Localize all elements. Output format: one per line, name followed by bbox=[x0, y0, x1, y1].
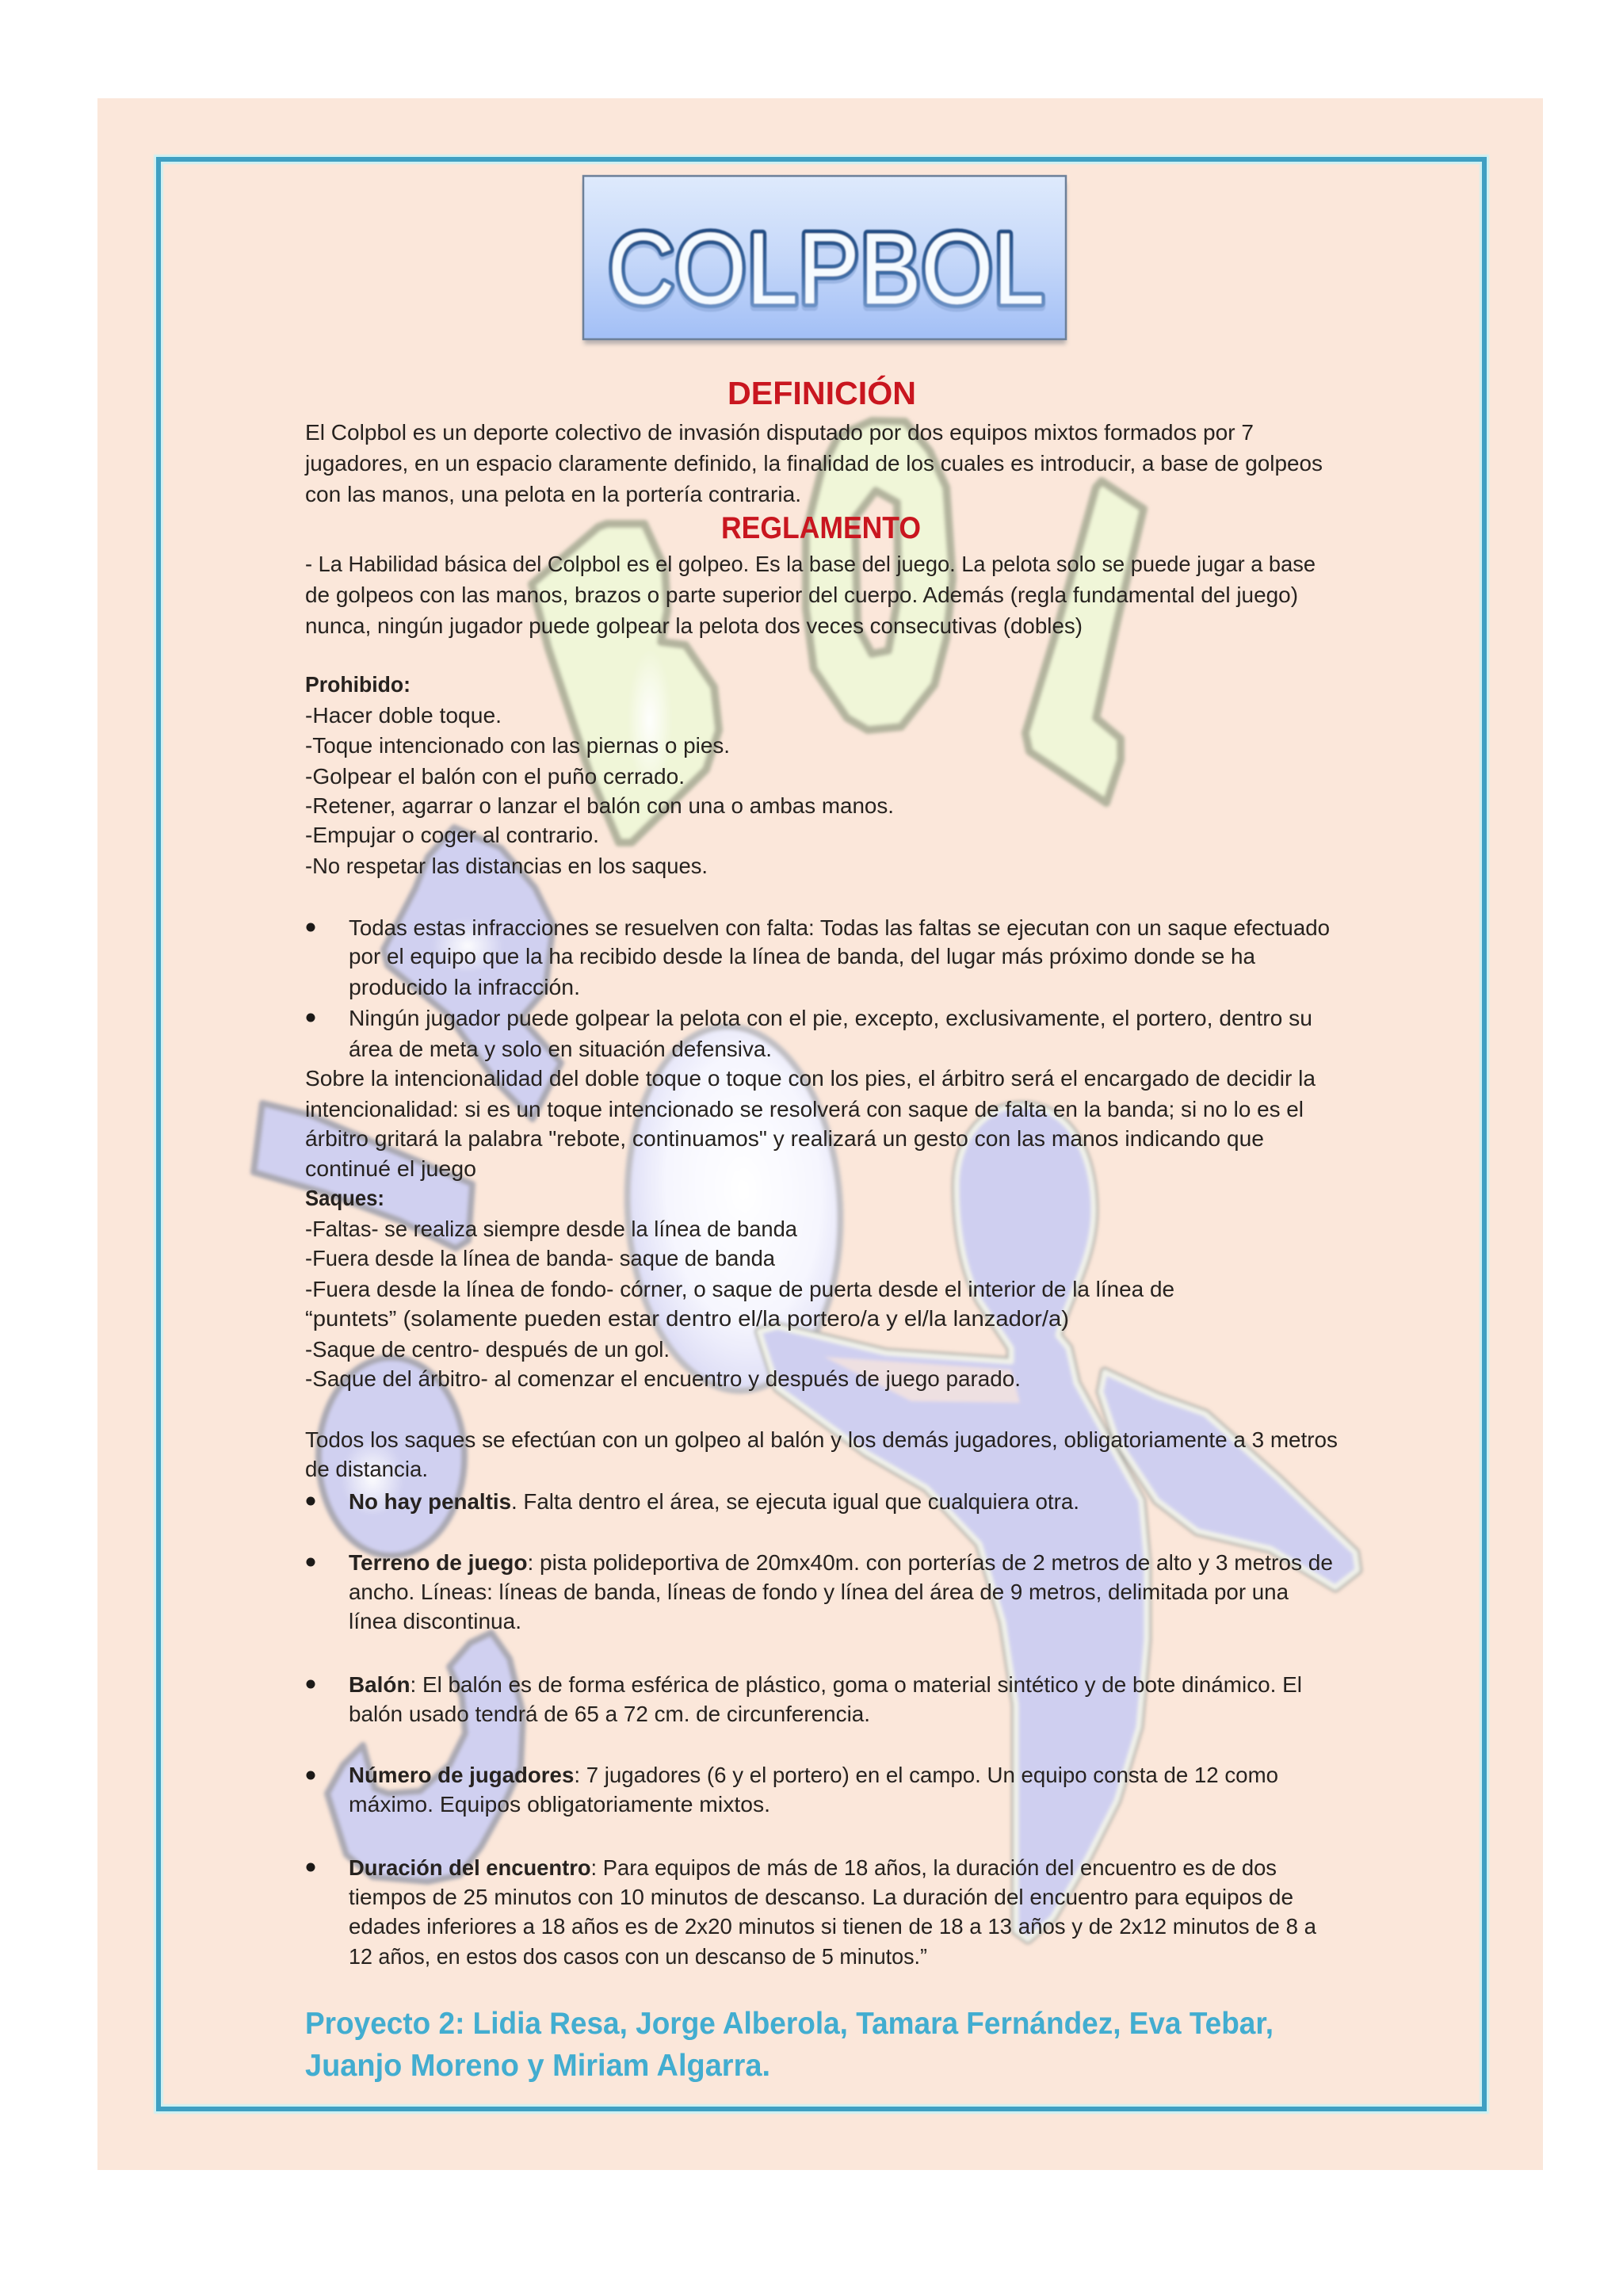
bulleted text: infracciones: Ningún jugador puede golpear la pelota con el pie, excepto, exclusivamente, el portero, dentro su bbox=[349, 1006, 1312, 1030]
frame: blue border bbox=[158, 159, 1484, 2109]
text block: definición: jugadores, en un espacio claramente definido, la finalidad de los cuales es introducir, a base de golpeos bbox=[304, 451, 1323, 476]
bulleted text: número de jugadores: máximo. Equipos obligatoriamente mixtos. bbox=[349, 1792, 770, 1817]
title banner: COLPBOL: COLPBOL bbox=[608, 212, 1044, 326]
text block: saques list bbox=[305, 1186, 1174, 1391]
text block: prohibido list: -No respetar las distancias en los saques. bbox=[305, 854, 708, 878]
text block: distancia: Todos los saques se efectúan con un golpeo al balón y los demás jugadores, obligatoriamente a 3 metros bbox=[305, 1427, 1338, 1452]
credits: authors bbox=[305, 2007, 1274, 2083]
bulleted text: terreno de juego: línea discontinua. bbox=[349, 1609, 521, 1633]
heading: REGLAMENTO: REGLAMENTO bbox=[721, 511, 921, 545]
text block: definición: El Colpbol es un deporte colectivo de invasión disputado por dos equipos mixtos formados por 7 bbox=[305, 420, 1254, 445]
bulleted text: duración bbox=[306, 1855, 1316, 1969]
text block: reglamento intro: - La Habilidad básica del Colpbol es el golpeo. Es la base del juego. La pelota solo se puede jugar a base bbox=[305, 552, 1316, 576]
bulleted text: infracciones: Todas estas infracciones se resuelven con falta: Todas las faltas se ejecutan con un saque efectuado bbox=[349, 915, 1330, 940]
text block: saques list: -Saque del árbitro- al comenzar el encuentro y después de juego parado. bbox=[305, 1366, 1021, 1391]
text block: prohibido list: Prohibido: bbox=[305, 672, 411, 697]
watermark: COL lavender shapes bbox=[254, 827, 1358, 1939]
bulleted text: balón bbox=[306, 1672, 1302, 1726]
text block: prohibido list: -Hacer doble toque. bbox=[305, 703, 502, 728]
text block: reglamento intro bbox=[305, 552, 1316, 638]
text block: intencionalidad: Sobre la intencionalidad del doble toque o toque con los pies, el árbitro será el encargado de decidir la bbox=[305, 1066, 1316, 1091]
text block: saques list: -Saque de centro- después de un gol. bbox=[305, 1337, 670, 1362]
text block: reglamento intro: nunca, ningún jugador puede golpear la pelota dos veces consecutivas (dobles) bbox=[305, 613, 1083, 638]
bulleted text: número de jugadores bbox=[306, 1763, 1278, 1817]
bulleted text: balón: Balón: El balón es de forma esférica de plástico, goma o material sintético y de bote dinámico. El bbox=[349, 1672, 1302, 1697]
bulleted text: infracciones: producido la infracción. bbox=[349, 975, 580, 999]
credits: authors: Proyecto 2: Lidia Resa, Jorge Alberola, Tamara Fernández, Eva Tebar, bbox=[305, 2007, 1274, 2041]
watermark: BOL green letters bbox=[532, 421, 1144, 842]
bulleted text: número de jugadores: Número de jugadores: 7 jugadores (6 y el portero) en el campo. Un equipo consta de 12 como bbox=[349, 1763, 1278, 1787]
text block: prohibido list: -Golpear el balón con el puño cerrado. bbox=[305, 764, 685, 789]
text block: prohibido list: -Toque intencionado con las piernas o pies. bbox=[305, 733, 730, 758]
bulleted text: duración: 12 años, en estos dos casos con un descanso de 5 minutos.” bbox=[349, 1944, 927, 1969]
text block: intencionalidad bbox=[305, 1066, 1316, 1181]
credits: authors: Juanjo Moreno y Miriam Algarra. bbox=[305, 2049, 770, 2083]
text block: prohibido list bbox=[305, 672, 894, 878]
text block: intencionalidad: intencionalidad: si es un toque intencionado se resolverá con saque de falta en la banda; si no lo es el bbox=[305, 1097, 1304, 1121]
bulleted text: infracciones: por el equipo que la ha recibido desde la línea de banda, del lugar más próximo donde se ha bbox=[349, 944, 1255, 968]
heading: DEFINICIÓN: DEFINICIÓN bbox=[727, 375, 916, 411]
bulleted text: duración: edades inferiores a 18 años es de 2x20 minutos si tienen de 18 a 13 años y de 2x12 minutos de 8 a bbox=[349, 1914, 1316, 1939]
text block: intencionalidad: continué el juego bbox=[305, 1156, 476, 1181]
bulleted text: infracciones: área de meta y solo en situación defensiva. bbox=[349, 1037, 772, 1061]
text block: saques list: Saques: bbox=[305, 1186, 384, 1210]
text block: definición: con las manos, una pelota en la portería contraria. bbox=[305, 482, 801, 506]
text block: prohibido list: -Retener, agarrar o lanzar el balón con una o ambas manos. bbox=[305, 793, 894, 818]
text block: saques list: -Faltas- se realiza siempre desde la línea de banda bbox=[305, 1217, 797, 1241]
title banner: COLPBOL bbox=[583, 176, 1066, 344]
text block: definición bbox=[304, 420, 1323, 506]
bulleted text: terreno de juego bbox=[306, 1550, 1333, 1633]
bulleted text: terreno de juego: ancho. Líneas: líneas de banda, líneas de fondo y línea del área de 9 metros, delimitada por una bbox=[349, 1580, 1289, 1604]
text block: distancia: de distancia. bbox=[305, 1457, 428, 1481]
text block: saques list: -Fuera desde la línea de fondo- córner, o saque de puerta desde el interior de la línea de bbox=[305, 1277, 1174, 1301]
bulleted text: duración: Duración del encuentro: Para equipos de más de 18 años, la duración del encuentro es de dos bbox=[349, 1855, 1277, 1880]
title banner: COLPBOL: COLPBOL bbox=[608, 216, 1044, 329]
text block: intencionalidad: árbitro gritará la palabra "rebote, continuamos" y realizará un gesto con las manos indicando que bbox=[305, 1126, 1264, 1151]
text block: distancia bbox=[305, 1427, 1338, 1481]
text block: reglamento intro: de golpeos con las manos, brazos o parte superior del cuerpo. Además (regla fundamental del juego) bbox=[305, 583, 1298, 607]
bulleted text: duración: tiempos de 25 minutos con 10 minutos de descanso. La duración del encuentro para equipos de bbox=[349, 1885, 1293, 1909]
text block: saques list: -Fuera desde la línea de banda- saque de banda bbox=[305, 1246, 775, 1270]
bulleted text: terreno de juego: Terreno de juego: pista polideportiva de 20mx40m. con porterías de 2 metros de alto y 3 metros de bbox=[349, 1550, 1333, 1575]
text block: prohibido list: -Empujar o coger al contrario. bbox=[305, 823, 599, 847]
bulleted text: infracciones bbox=[306, 915, 1330, 1061]
text block: saques list: “puntets” (solamente pueden estar dentro el/la portero/a y el/la lanzador/a) bbox=[305, 1306, 1069, 1331]
bulleted text: balón: balón usado tendrá de 65 a 72 cm. de circunferencia. bbox=[349, 1702, 870, 1726]
bulleted text: penaltis: No hay penaltis. Falta dentro el área, se ejecuta igual que cualquiera otra. bbox=[349, 1489, 1079, 1514]
